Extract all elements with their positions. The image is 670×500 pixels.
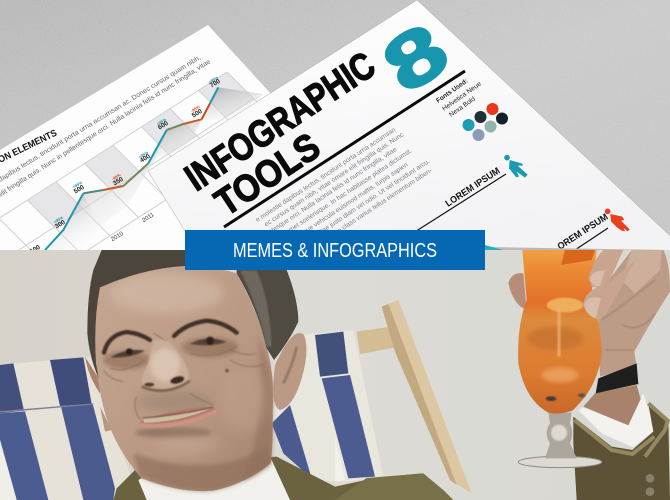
shirt cuff and sleeve xyxy=(573,393,670,500)
chart value labels: 700 xyxy=(209,78,222,90)
forehead highlight xyxy=(110,273,223,313)
text block: intro paragraph: Curabitur vitae justo diam vel odio. Ut vel tincidunt arcu. xyxy=(291,158,431,253)
chart line xyxy=(45,87,218,250)
text block: chart description: dapibus lectus, tincidunt porta urna accumsan ac. Donec cursus quam nibh, xyxy=(0,54,202,184)
chart year labels: 2011 xyxy=(141,212,156,224)
stubble around mouth xyxy=(137,392,213,412)
deck chair wood frame xyxy=(357,300,472,493)
eye sockets xyxy=(103,351,150,369)
chart value labels: 300 xyxy=(54,219,67,231)
deck chair left part xyxy=(0,357,133,500)
glass bowl and drink xyxy=(518,250,602,414)
text block: intro paragraph: pellentesque orci. Nulla lacinia felis id nunc fringilla, vitae xyxy=(256,146,398,243)
chart value labels: 400 xyxy=(139,153,152,165)
text block: chart description: elit fringilla quis. Nunc in pellentesque orci. Nulla lacinia felis id nunc fringilla, vitae xyxy=(0,58,212,199)
heading: TOOLS: TOOLS xyxy=(208,126,328,225)
glass foot xyxy=(518,456,602,468)
text block: fonts used: Fonts Used: xyxy=(435,78,469,105)
deck chair right part xyxy=(272,330,383,482)
icon: teal person xyxy=(504,155,528,178)
head xyxy=(85,250,307,491)
jacket and shirt xyxy=(113,457,453,500)
chart area shading xyxy=(45,87,263,250)
text block: intro paragraph: e molestie dapibus lectus, tincidunt porta urna accumsan xyxy=(255,126,397,224)
face base xyxy=(95,265,273,491)
textured grey background xyxy=(0,0,670,250)
photo: man with cocktail xyxy=(0,250,670,500)
panel: infographic mockup scene xyxy=(0,0,670,250)
chart value labels xyxy=(29,78,222,256)
text block: intro paragraph: Vestibulum ante class varius tellus elementum biben- xyxy=(300,167,434,258)
hair xyxy=(87,250,187,378)
glass stem xyxy=(545,413,577,458)
icon: red person xyxy=(605,208,630,231)
hand and wrist xyxy=(508,250,670,425)
chart percent tags: -95% xyxy=(190,104,201,113)
label: lorem ipsum 1 xyxy=(416,167,506,230)
right face shadow xyxy=(243,337,273,480)
text block: intro paragraph: Pellentesque vehicula euismod mattis, turpis sapien xyxy=(279,161,410,251)
chart percent tags: +95% xyxy=(138,150,149,160)
cocktail glass xyxy=(518,250,637,468)
text block: intro paragraph: ec cursus quam nibh, vitae ornare elit fringilla quis. Nunc xyxy=(263,131,406,228)
chart year labels: 2010 xyxy=(110,231,125,243)
chart percent tags xyxy=(53,75,219,225)
fingers over glass xyxy=(583,250,637,320)
panel: back sheet with line chart xyxy=(0,25,270,250)
chart percent tags: -95% xyxy=(111,172,122,181)
ears xyxy=(273,333,307,410)
headline rule xyxy=(224,71,465,227)
facial features xyxy=(103,321,267,453)
banner title: MEMES & INFOGRAPHICS xyxy=(233,240,437,262)
chart percent tags: +95% xyxy=(208,75,219,85)
chart year labels xyxy=(110,212,154,242)
mole xyxy=(225,369,229,372)
chart value labels: 500 xyxy=(191,108,204,120)
chart percent tags: +95% xyxy=(53,215,64,225)
watch strap xyxy=(596,363,638,393)
panel: front sheet xyxy=(148,0,670,274)
chart value labels: 500 xyxy=(73,184,86,196)
text block: intro paragraph: Nunc sit amet scelerisque. In hac habitasse platea dictumst. xyxy=(263,147,413,250)
cheek highlight xyxy=(220,368,267,432)
chart percent tags: +95% xyxy=(72,180,83,190)
nose xyxy=(142,339,189,388)
label: lorem ipsum 1: LOREM IPSUM xyxy=(444,166,502,210)
mouth xyxy=(140,407,215,425)
numeral 8: 8 xyxy=(369,7,463,109)
eyebrows xyxy=(104,332,150,353)
lower jaw shadow xyxy=(133,447,271,491)
text block: fonts used: Helvetica Neue xyxy=(441,80,483,113)
wrinkles xyxy=(103,333,263,420)
chart value labels: 600 xyxy=(157,120,170,132)
label: lorem ipsum 2: OREM IPSUM xyxy=(556,212,610,253)
banner xyxy=(185,230,485,270)
chart grid xyxy=(0,72,257,250)
heading: INFOGRAPHIC: INFOGRAPHIC xyxy=(178,44,383,200)
eyes xyxy=(111,350,145,358)
chart value labels: 350 xyxy=(112,176,125,188)
chart percent tags: +95% xyxy=(156,117,167,127)
chin highlight xyxy=(155,437,218,453)
photo wall xyxy=(0,250,670,500)
chart value labels: 100 xyxy=(29,244,42,256)
colour palette dots xyxy=(462,103,508,141)
text block: fonts used: Nexa Bold xyxy=(448,96,477,119)
page curl at sheet bottom xyxy=(492,247,666,250)
